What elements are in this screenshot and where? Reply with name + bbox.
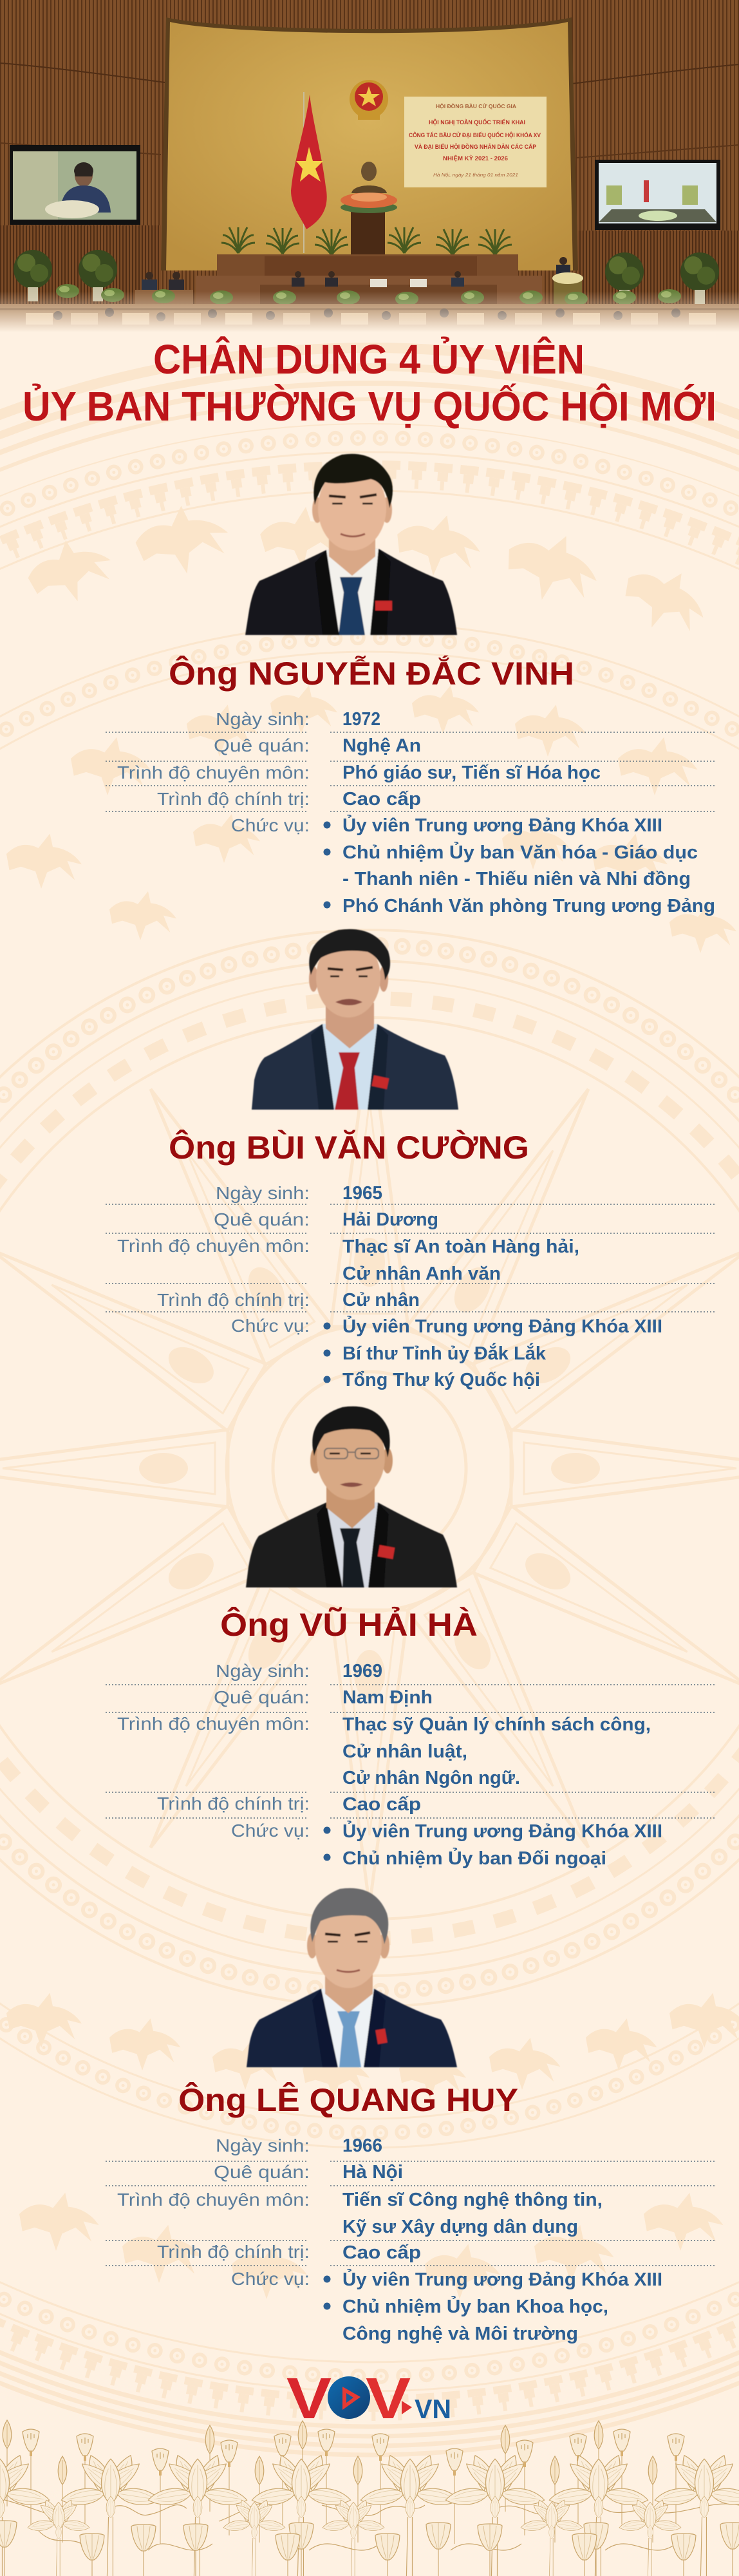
profile table: Phó Chánh Văn phòng Trung ương Đảng: [342, 896, 715, 916]
wood walls: [0, 0, 739, 332]
profile table: 1965: [342, 1183, 382, 1204]
name: Ông NGUYỄN ĐẮC VINH: [169, 655, 574, 692]
profile table: [106, 1661, 715, 1869]
profile table: Quê quán:: [214, 2162, 310, 2182]
profile table: 1969: [342, 1661, 382, 1681]
profile table: Chủ nhiệm Ủy ban Đối ngoại: [342, 1847, 606, 1869]
profile table: Thạc sỹ Quản lý chính sách công,: [342, 1714, 651, 1735]
title: ỦY BAN THƯỜNG VỤ QUỐC HỘI MỚI: [23, 383, 716, 430]
profile table: [106, 2136, 715, 2344]
profile table: Trình độ chính trị:: [157, 2242, 310, 2262]
banner: VÀ ĐẠI BIỂU HỘI ĐỒNG NHÂN DÂN CÁC CẤP: [415, 143, 536, 150]
profile table: Ủy viên Trung ương Đảng Khóa XIII: [342, 814, 662, 836]
title: CHÂN DUNG 4 ỦY VIÊN: [153, 336, 585, 383]
profile table: Ủy viên Trung ương Đảng Khóa XIII: [342, 2268, 662, 2290]
profile table: Chức vụ:: [231, 2269, 310, 2289]
profile table: Kỹ sư Xây dựng dân dụng: [342, 2217, 578, 2237]
profile table: Quê quán:: [214, 735, 310, 755]
profile table: Trình độ chuyên môn:: [117, 762, 310, 782]
profile table: Ngày sinh:: [216, 1183, 310, 1203]
footer lotus illustration: [0, 2420, 739, 2576]
banner: HỘI NGHỊ TOÀN QUỐC TRIỂN KHAI: [429, 118, 525, 126]
profile table: Hà Nội: [342, 2162, 403, 2183]
lotus seed cups: [0, 2521, 739, 2576]
delegate seats: [0, 304, 739, 332]
profile table: Cử nhân Anh văn: [342, 1264, 501, 1284]
panel: Nguyễn Đắc Vinh: [106, 454, 715, 916]
profile table: Trình độ chính trị:: [157, 1794, 310, 1814]
profile table: Cao cấp: [342, 1794, 421, 1815]
profile table: Trình độ chính trị:: [157, 789, 310, 809]
portrait: Vũ Hải Hà: [246, 1406, 457, 1587]
panel: Lê Quang Huy: [106, 1888, 715, 2344]
profile table: Quê quán:: [214, 1687, 310, 1707]
profile table: Ủy viên Trung ương Đảng Khóa XIII: [342, 1315, 662, 1337]
profile table: Tổng Thư ký Quốc hội: [342, 1370, 540, 1390]
name: Ông LÊ QUANG HUY: [178, 2081, 518, 2118]
title: [23, 336, 716, 430]
profile table: Phó giáo sư, Tiến sĩ Hóa học: [342, 762, 601, 783]
profile table: Chủ nhiệm Ủy ban Văn hóa - Giáo dục: [342, 841, 698, 863]
profile table: Chức vụ:: [231, 1316, 310, 1336]
profile table: Trình độ chuyên môn:: [117, 1714, 310, 1734]
profile table: 1972: [342, 709, 380, 730]
profile table: Cử nhân: [342, 1290, 420, 1311]
golden central wall: [161, 17, 578, 270]
profile table: Ngày sinh:: [216, 2136, 310, 2155]
banner: [404, 97, 547, 187]
banner: Hà Nội, ngày 21 tháng 01 năm 2021: [433, 173, 518, 178]
profile table: Thạc sĩ An toàn Hàng hải,: [342, 1236, 579, 1257]
right video screen: [595, 160, 720, 230]
profile table: [106, 709, 715, 916]
VOV.VN logo: [286, 2367, 451, 2431]
profile table: Hải Dương: [342, 1209, 438, 1230]
profile table: Bí thư Tỉnh ủy Đắk Lắk: [342, 1342, 547, 1364]
portrait: Bùi Văn Cường: [252, 929, 458, 1110]
header photo: National Assembly hall: [0, 0, 739, 332]
portrait: Lê Quang Huy: [247, 1888, 457, 2067]
profile table: Nam Định: [342, 1687, 433, 1708]
name: Ông BÙI VĂN CƯỜNG: [169, 1129, 529, 1166]
profile table: - Thanh niên - Thiếu niên và Nhi đồng: [342, 869, 691, 889]
left video screen: [10, 145, 140, 225]
profile table: Trình độ chuyên môn:: [117, 2190, 310, 2210]
profile table: Ngày sinh:: [216, 709, 310, 729]
portrait: Nguyễn Đắc Vinh: [245, 454, 457, 635]
lotus stems and leaves: [0, 2499, 739, 2550]
VOV.VN logo: VN: [415, 2394, 451, 2424]
profile table: Cử nhân luật,: [342, 1741, 467, 1762]
panel: Vũ Hải Hà: [106, 1406, 715, 1869]
large lotus flowers: [0, 2452, 739, 2576]
profile table: Ngày sinh:: [216, 1661, 310, 1681]
panel: Bùi Văn Cường: [106, 929, 715, 1390]
profile table: Công nghệ và Môi trường: [342, 2324, 578, 2344]
potted palms: [221, 227, 512, 255]
flag: [291, 92, 327, 253]
small lotus flowers: [26, 2498, 682, 2576]
profile table: Quê quán:: [214, 1209, 310, 1229]
profile table: [106, 1183, 715, 1390]
profile table: Trình độ chuyên môn:: [117, 1236, 310, 1256]
profile table: Tiến sĩ Công nghệ thông tin,: [342, 2190, 603, 2210]
VOV.VN logo: V: [366, 2367, 411, 2431]
profile table: Chức vụ:: [231, 815, 310, 835]
profile table: 1966: [342, 2136, 382, 2156]
bust, flowers and podium: [341, 162, 397, 254]
profile table: Chủ nhiệm Ủy ban Khoa học,: [342, 2295, 608, 2317]
profile table: Trình độ chính trị:: [157, 1290, 310, 1310]
profile table: Nghệ An: [342, 735, 421, 756]
VOV.VN logo: V: [286, 2367, 332, 2431]
lotus buds and pods: [3, 2420, 684, 2544]
profile table: Chức vụ:: [231, 1821, 310, 1841]
profile table: Cao cấp: [342, 789, 421, 810]
profile table: Cao cấp: [342, 2242, 421, 2263]
profile table: Cử nhân Ngôn ngữ.: [342, 1768, 520, 1788]
name: Ông VŨ HẢI HÀ: [220, 1606, 478, 1643]
profile table: Ủy viên Trung ương Đảng Khóa XIII: [342, 1820, 662, 1842]
large plants: [14, 250, 719, 306]
banner: HỘI ĐỒNG BẦU CỬ QUỐC GIA: [436, 103, 516, 109]
banner: NHIỆM KỲ 2021 - 2026: [443, 155, 508, 162]
rostrum: [135, 254, 583, 314]
national emblem: [350, 80, 388, 120]
banner: CÔNG TÁC BẦU CỬ ĐẠI BIỂU QUỐC HỘI KHÓA XV: [409, 131, 541, 138]
